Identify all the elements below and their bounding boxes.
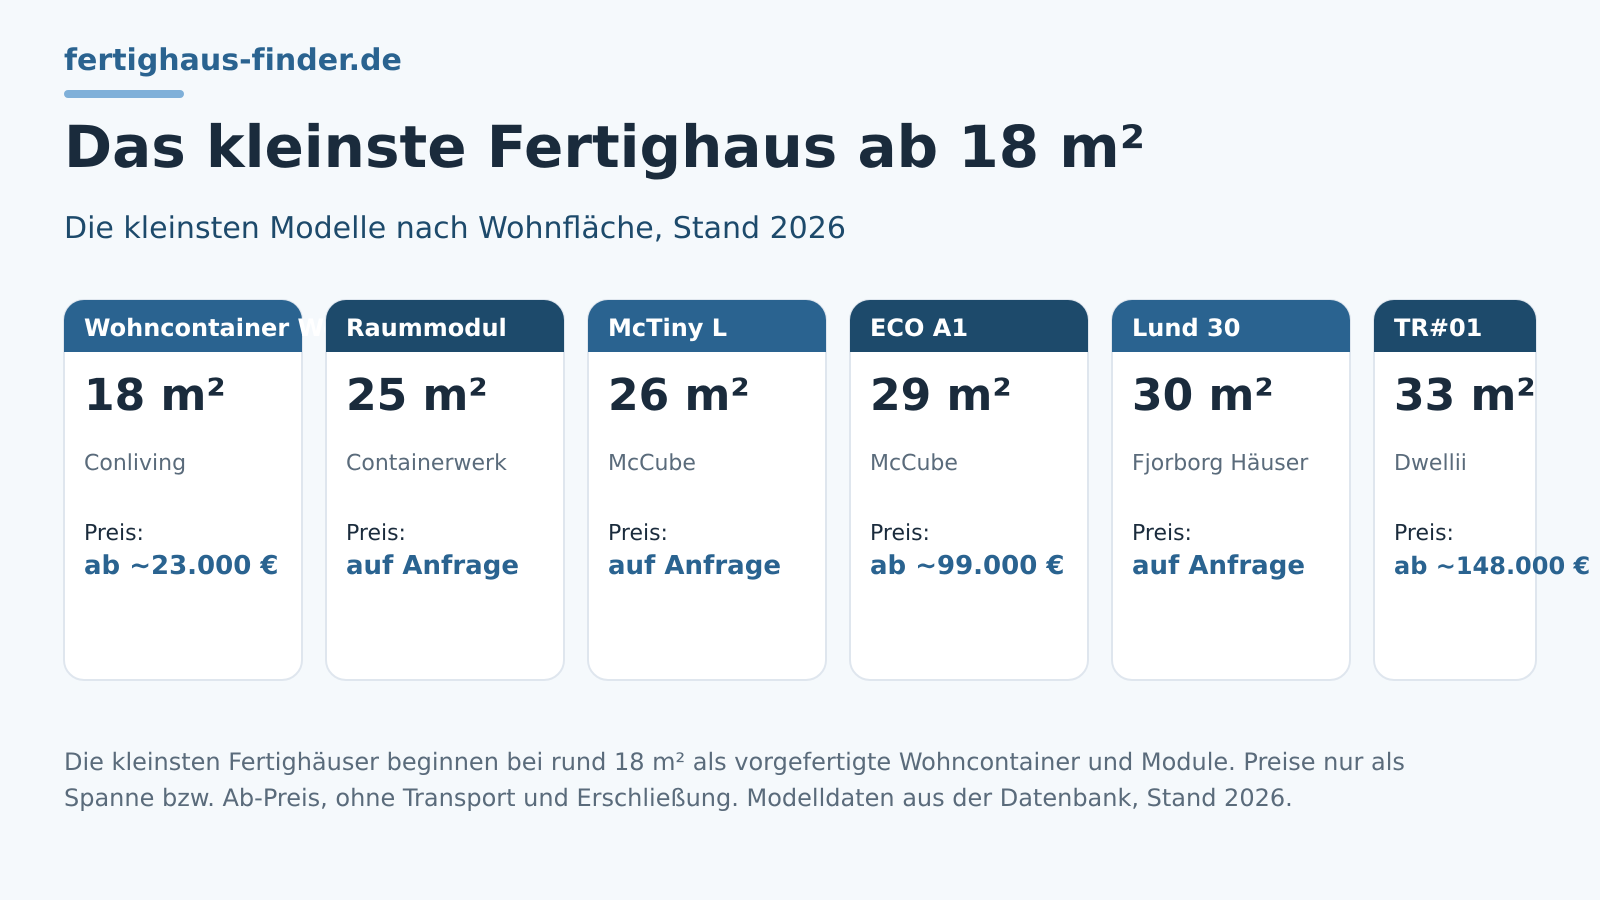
price label: Preis: — [346, 521, 406, 546]
card header — [1112, 300, 1350, 352]
area value: 25 m² — [346, 370, 488, 421]
panel: card TR#01 — [1373, 299, 1537, 681]
price value: ab ~23.000 € — [84, 551, 278, 581]
brand name: fertighaus-finder.de — [64, 43, 402, 78]
subtitle: Die kleinsten Modelle nach Wohnfläche, Stand 2026 — [64, 211, 846, 246]
manufacturer: Fjorborg Häuser — [1132, 451, 1308, 476]
card header: Raummodul — [346, 314, 507, 342]
price label: Preis: — [1394, 521, 1454, 546]
area value: 33 m² — [1394, 370, 1536, 421]
card header: Lund 30 — [1132, 314, 1240, 342]
panel: card Raummodul — [325, 299, 565, 681]
price value: auf Anfrage — [1132, 551, 1305, 581]
manufacturer: Dwellii — [1394, 451, 1467, 476]
accent bar — [64, 90, 184, 98]
card header: TR#01 — [1394, 314, 1482, 342]
card header: Wohncontainer Wo — [84, 314, 340, 342]
panel: card McTiny L — [587, 299, 827, 681]
card header — [588, 300, 826, 352]
price label: Preis: — [608, 521, 668, 546]
area value: 30 m² — [1132, 370, 1274, 421]
price label: Preis: — [1132, 521, 1192, 546]
manufacturer: McCube — [608, 451, 696, 476]
manufacturer: McCube — [870, 451, 958, 476]
panel: card Wohncontainer — [63, 299, 303, 681]
price value: ab ~148.000 € — [1394, 552, 1590, 580]
panel: card Lund 30 — [1111, 299, 1351, 681]
footnote: Spanne bzw. Ab-Preis, ohne Transport und Erschließung. Modelldaten aus der Datenbank, Stand 2026. — [64, 784, 1293, 812]
price label: Preis: — [870, 521, 930, 546]
manufacturer: Conliving — [84, 451, 186, 476]
area value: 29 m² — [870, 370, 1012, 421]
title: Das kleinste Fertighaus ab 18 m² — [64, 113, 1145, 181]
area value: 18 m² — [84, 370, 226, 421]
price label: Preis: — [84, 521, 144, 546]
card header — [326, 300, 564, 352]
panel: card ECO A1 — [849, 299, 1089, 681]
footnote — [64, 748, 1405, 812]
card header: McTiny L — [608, 314, 727, 342]
footnote: Die kleinsten Fertighäuser beginnen bei rund 18 m² als vorgefertigte Wohncontainer und Module. Preise nur als — [64, 748, 1405, 776]
area value: 26 m² — [608, 370, 750, 421]
card header — [64, 300, 302, 352]
price value: ab ~99.000 € — [870, 551, 1064, 581]
price value: auf Anfrage — [346, 551, 519, 581]
manufacturer: Containerwerk — [346, 451, 507, 476]
price value: auf Anfrage — [608, 551, 781, 581]
card header: ECO A1 — [870, 314, 968, 342]
card header — [850, 300, 1088, 352]
card header — [1374, 300, 1536, 352]
